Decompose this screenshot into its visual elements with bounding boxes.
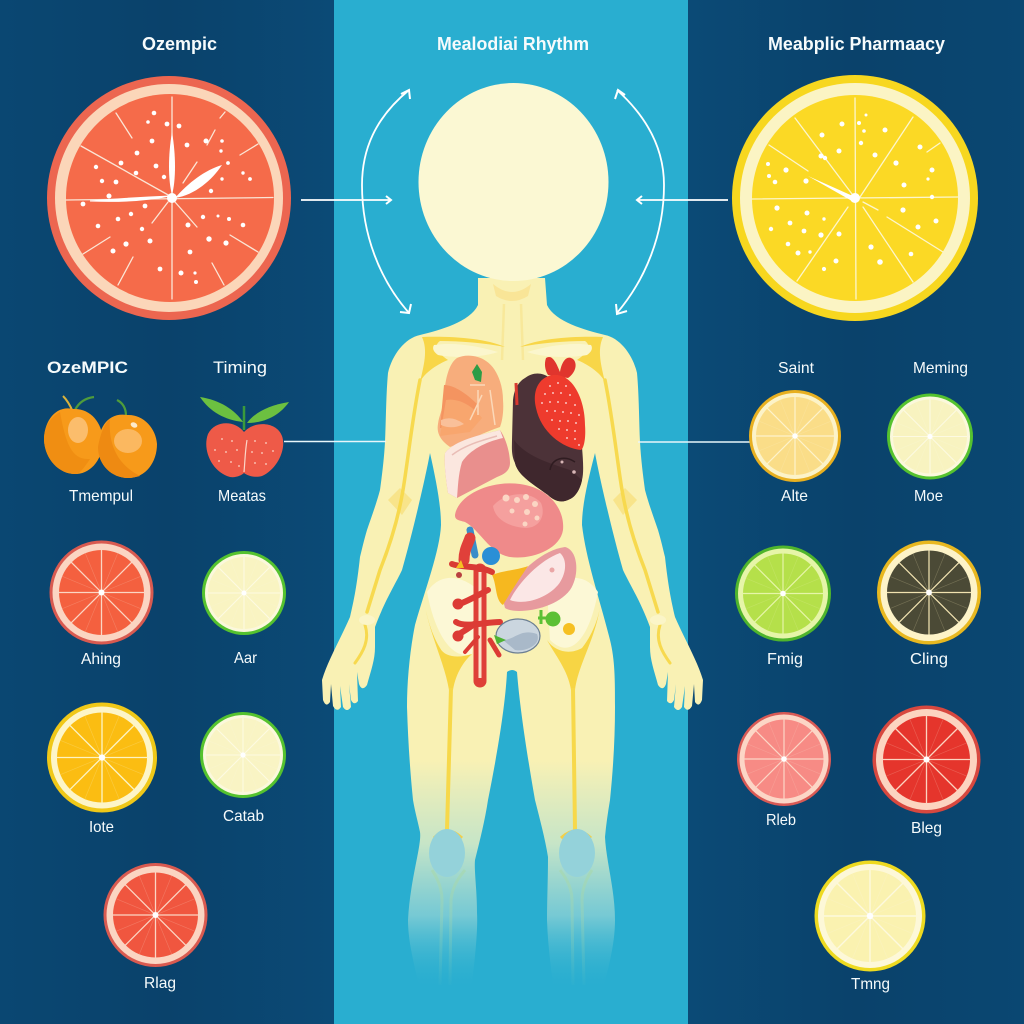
icon: twin oranges xyxy=(44,396,157,478)
fruit: orange Iote xyxy=(47,702,157,812)
label: Saint: Saint xyxy=(778,360,815,377)
arrow: right cycle arc xyxy=(615,90,664,314)
fruit: pale lime Aar xyxy=(202,551,286,635)
fruit: pale lemon Tmng xyxy=(814,860,926,972)
label: Iote: Iote xyxy=(89,819,114,836)
fruit: lemon Alte xyxy=(749,390,841,482)
heading: right: Meabplic Pharmaacy xyxy=(768,34,945,54)
label: Rlag: Rlag xyxy=(144,975,176,992)
organ: yellow gland xyxy=(492,566,528,605)
connector: left organ line xyxy=(284,440,386,442)
organ: orange lung xyxy=(438,356,503,447)
heading: left: Ozempic xyxy=(142,34,217,54)
arrow: left cycle arc xyxy=(362,90,411,313)
label: OzeMPIC: OzeMPIC xyxy=(47,358,128,377)
human body silhouette xyxy=(322,278,703,1000)
fruit: red grapefruit Rlag xyxy=(104,863,208,967)
label: Meming: Meming xyxy=(913,360,968,377)
icon: red apple xyxy=(200,397,289,477)
panel: left background xyxy=(0,0,334,1024)
left knee xyxy=(429,829,465,985)
label: Catab: Catab xyxy=(223,808,264,825)
organ: dark liver xyxy=(512,374,583,501)
fruit: dark citrus Cling xyxy=(877,540,981,644)
fruit: red grapefruit Ahing xyxy=(50,540,154,644)
fruit: lime Fmig xyxy=(735,546,831,642)
fruit: blood orange Bleg xyxy=(872,706,980,814)
head xyxy=(418,83,608,281)
skeleton and neck details xyxy=(355,284,670,830)
fruit: pink grapefruit Rleb xyxy=(737,712,831,806)
connector: right organ line xyxy=(638,441,750,443)
panel: right background xyxy=(688,0,1024,1024)
label: Tmng: Tmng xyxy=(851,976,890,993)
arrow: left input xyxy=(301,196,391,204)
right knee xyxy=(559,829,595,985)
label: Moe: Moe xyxy=(914,488,943,505)
heading: centre: Mealodiai Rhythm xyxy=(437,34,589,54)
organ: red intestine tangle xyxy=(452,530,500,681)
label: Timing: Timing xyxy=(213,358,267,377)
label: Tmempul: Tmempul xyxy=(69,488,133,505)
fruit: pale lime Moe xyxy=(887,394,973,480)
label: Fmig: Fmig xyxy=(767,651,803,668)
label: Rleb: Rleb xyxy=(766,812,796,829)
arrow: right input xyxy=(637,196,728,204)
label: Ahing: Ahing xyxy=(81,651,121,668)
label: Alte: Alte xyxy=(781,488,808,505)
organ: blue sphere xyxy=(482,547,500,565)
panel: centre background xyxy=(334,0,688,1024)
organ: stomach xyxy=(455,483,563,558)
organ: green sphere xyxy=(538,610,560,626)
large grapefruit clock xyxy=(47,76,291,320)
organ: strawberry xyxy=(535,357,585,450)
organ: pink tissue xyxy=(445,430,510,498)
large lemon slice xyxy=(732,75,978,321)
label: Cling: Cling xyxy=(910,651,948,668)
fruit: pale lime Catab xyxy=(200,712,286,798)
label: Aar: Aar xyxy=(234,650,258,667)
organ: yellow sphere xyxy=(563,623,575,635)
label: Bleg: Bleg xyxy=(911,820,942,837)
organ: pale kidney shape xyxy=(503,547,576,611)
label: Meatas: Meatas xyxy=(218,488,266,505)
organ: grey kidney xyxy=(494,619,540,653)
